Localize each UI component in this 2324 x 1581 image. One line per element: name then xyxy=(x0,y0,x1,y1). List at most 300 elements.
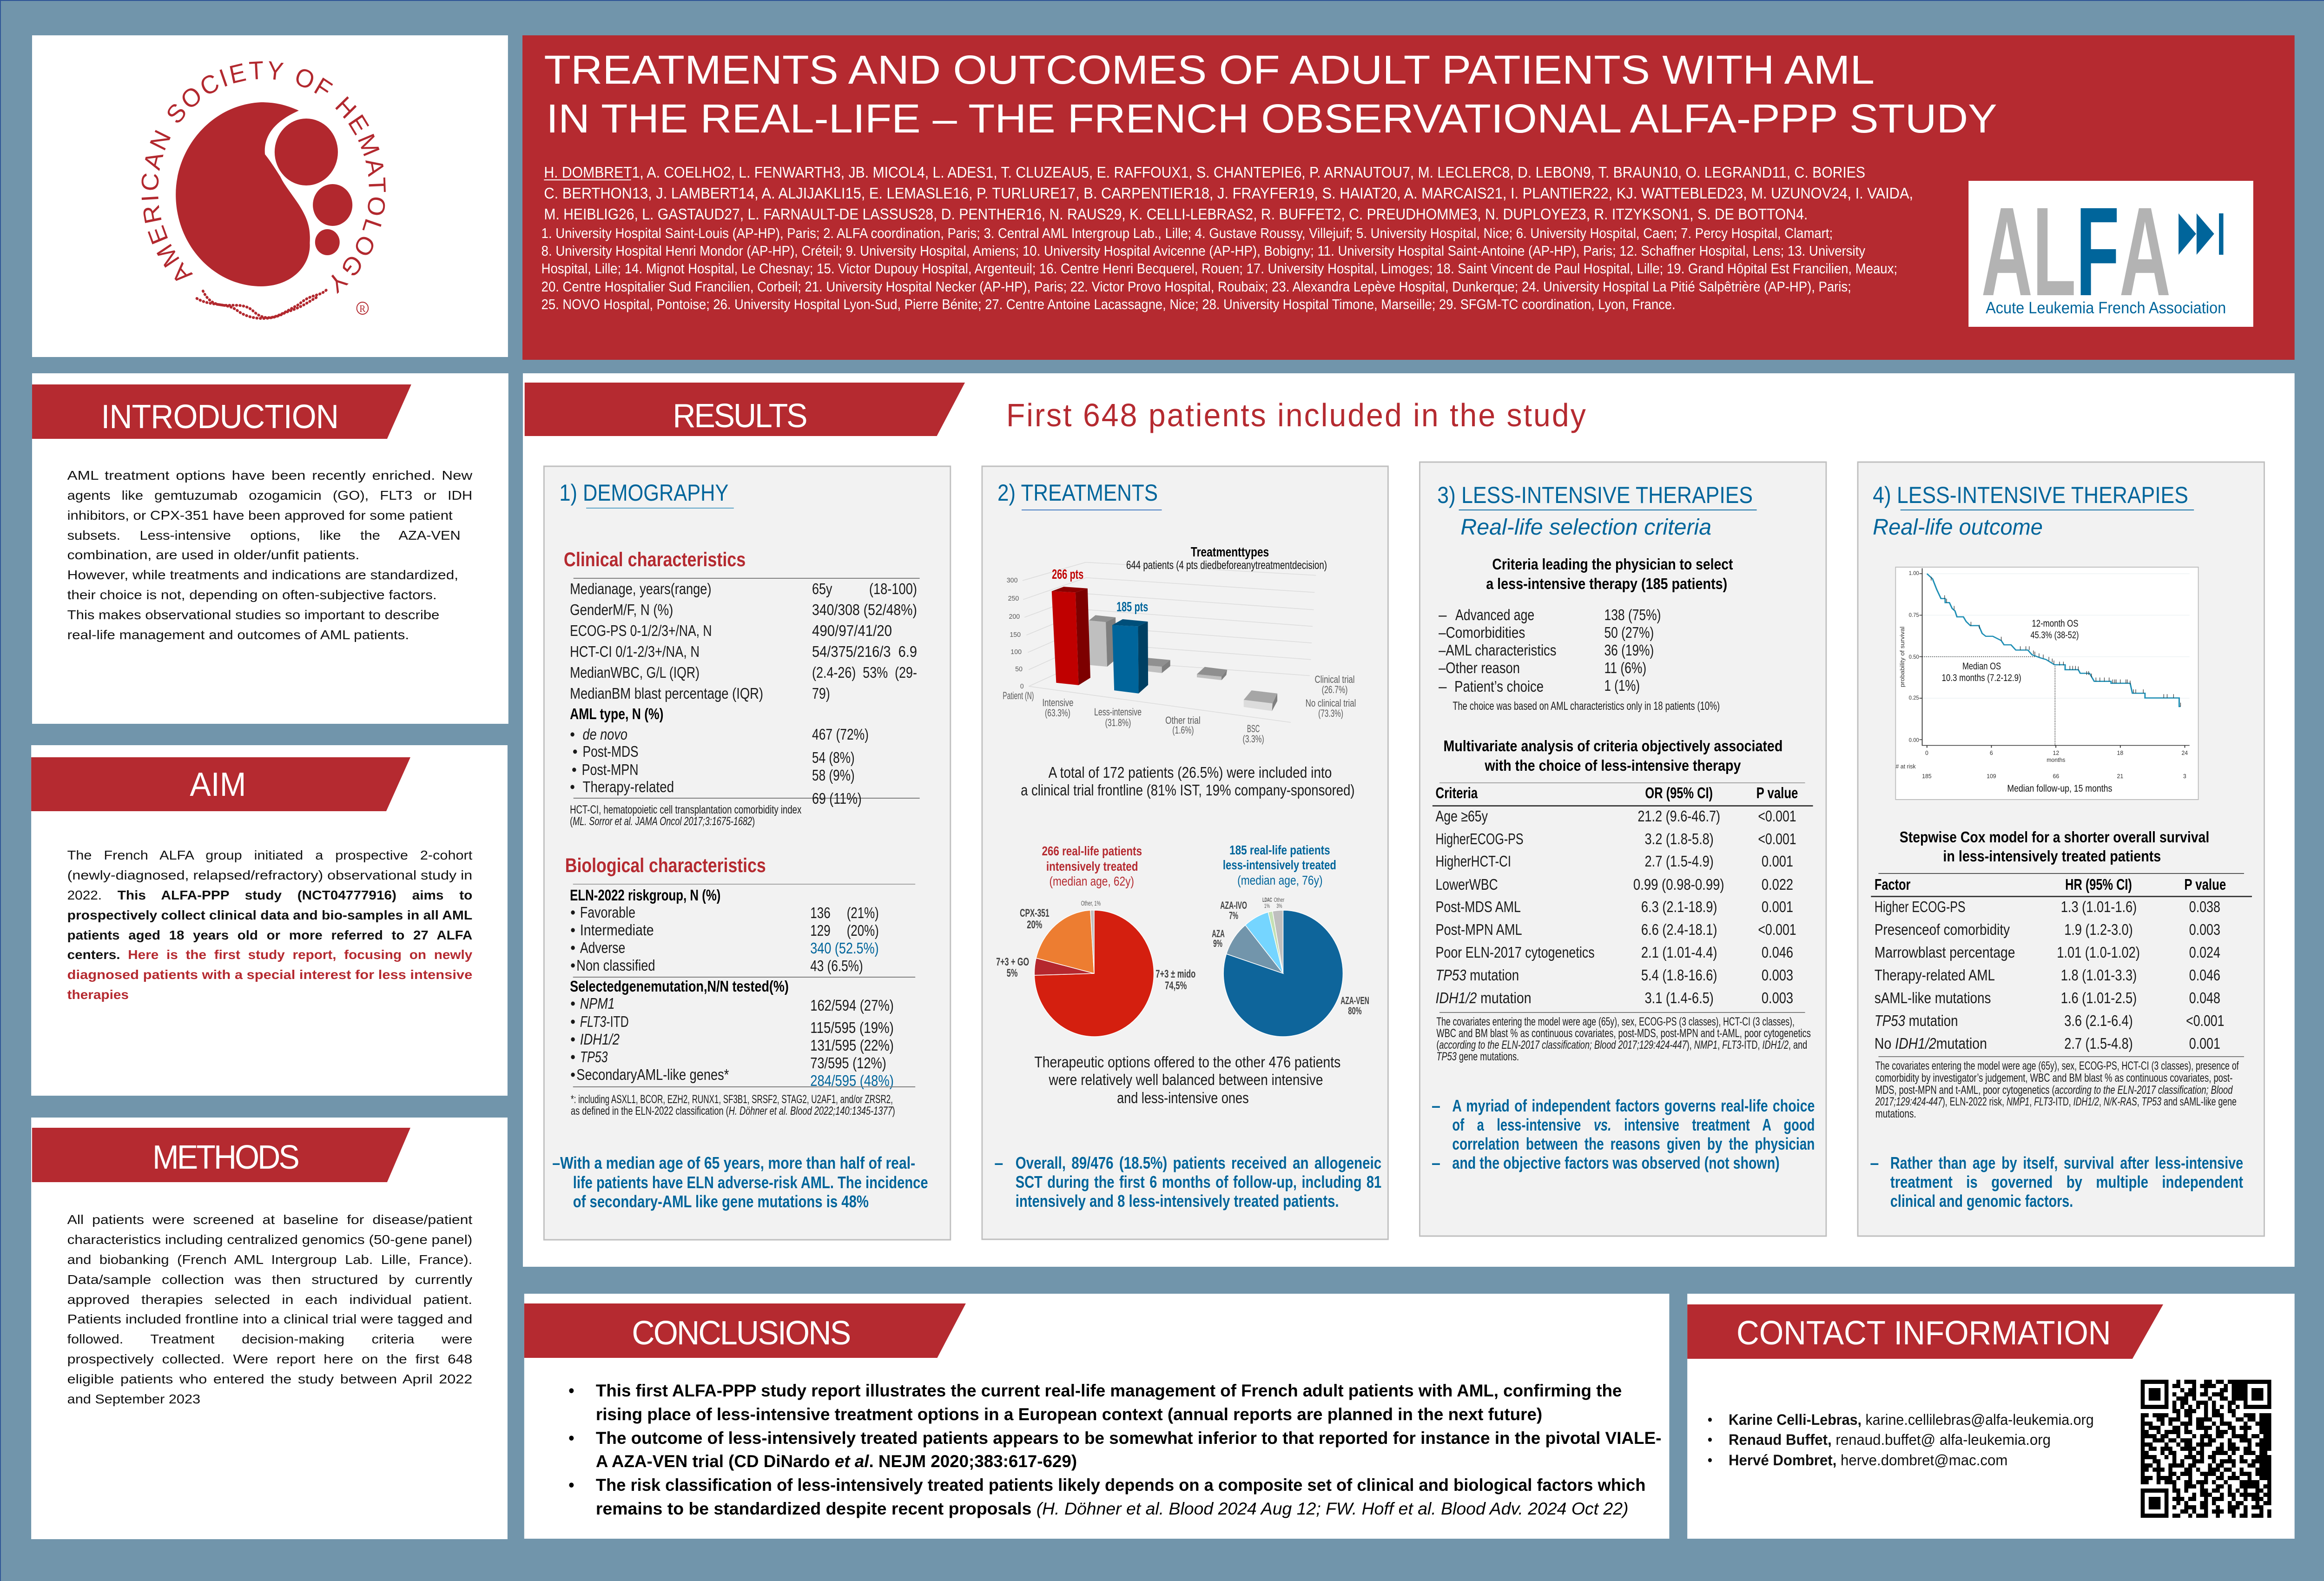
text: methods body: prospectively collected. Were report here on the first 648 xyxy=(67,1351,472,1366)
chart: pie of intensive treatments: CPX-351 xyxy=(1020,906,1050,919)
text: aim body: centers. Here is the first study report, focusing on newly xyxy=(67,947,472,962)
table: clinical characteristics: 54 (8%) xyxy=(812,749,855,766)
chart: pie of less-intensive treatments: AZA-VEN xyxy=(1340,995,1369,1006)
chart: pie of intensive treatments xyxy=(996,900,1195,1037)
chart: 3D bar chart of treatment types: 250 xyxy=(1008,595,1019,602)
icon: QR code xyxy=(2141,1380,2271,1518)
text: introduction body: agents like gemtuzumab ozogamicin (GO), FLT3 or IDH xyxy=(67,488,472,503)
table: multivariate analysis: WBC and BM blast % as continuous covariates, post-MDS, post-MPN and t-AML, poor cytogenetics xyxy=(1436,1027,1811,1040)
chart: Kaplan-Meier survival curve: 10.3 months (7.2-12.9) xyxy=(1942,673,2021,683)
table: multivariate analysis: P value xyxy=(1756,784,1798,801)
heading: demography: 1) DEMOGRAPHY xyxy=(559,480,728,506)
table: clinical characteristics: 467 (72%) xyxy=(812,726,869,743)
text: methods body: eligible patients who entered the study between April 2022 xyxy=(67,1371,472,1386)
list: conclusions: The outcome of less-intensively treated patients appears to be somewhat inferior to that reported for instance in the pivotal VIALE- xyxy=(596,1428,1661,1448)
text: introduction body xyxy=(67,468,473,642)
chart: 3D bar chart of treatment types: Less-intensive xyxy=(1094,706,1142,718)
heading: less-intensive therapies xyxy=(1437,483,1757,539)
table: biological characteristics: IDH1/2 xyxy=(580,1031,620,1048)
list: contacts: Hervé Dombret, herve.dombret@mac.com xyxy=(1729,1452,2007,1469)
text: therapeutic options: and less-intensive ones xyxy=(1117,1089,1249,1106)
table: clinical characteristics: Post-MPN xyxy=(582,761,639,778)
heading: less-intensive therapies: Real-life selection criteria xyxy=(1460,515,1711,539)
table: stepwise Cox model: Higher ECOG-PS xyxy=(1875,898,1966,915)
list: selection criteria: Patient’s choice xyxy=(1454,678,1544,695)
callout: treatment takeaway xyxy=(994,1154,1381,1211)
table: multivariate analysis: Multivariate analysis of criteria objectively associated xyxy=(1444,737,1783,754)
list: conclusions: • xyxy=(568,1475,574,1495)
chart: 3D bar chart of treatment types: No clinical trial xyxy=(1306,697,1356,709)
list: selection criteria: Advanced age xyxy=(1455,606,1534,623)
table: biological characteristics: 115/595 (19%) xyxy=(810,1019,894,1036)
callout: outcome takeaway: – xyxy=(1870,1154,1879,1172)
chart: 3D bar chart of treatment types: Other trial xyxy=(1165,714,1201,726)
table: clinical characteristics: (18-100) xyxy=(869,580,917,597)
table: stepwise Cox model: TP53 mutation xyxy=(1875,1012,1958,1029)
text: therapeutic options: Therapeutic options offered to the other 476 patients xyxy=(1034,1053,1340,1071)
text: clinical trial inclusion xyxy=(1021,764,1355,799)
affiliations xyxy=(541,225,1897,312)
panel: treatments xyxy=(982,466,1388,1239)
list: selection criteria: – xyxy=(1439,678,1447,695)
authors xyxy=(544,164,1913,223)
text: methods body: followed. Treatment decision-making criteria were xyxy=(67,1331,472,1346)
chart: Kaplan-Meier survival curve: # at risk xyxy=(1896,763,1916,770)
table: clinical characteristics: Clinical characteristics xyxy=(564,548,746,570)
table: multivariate analysis: 0.001 xyxy=(1762,898,1793,915)
chart heading: less-intensive patients: 185 real-life patients xyxy=(1229,842,1330,857)
text: aim body: patients aged 18 years old or more referred to 27 ALFA xyxy=(67,927,472,942)
chart: 3D bar chart of treatment types: 185 pts xyxy=(1116,599,1148,614)
chart: Kaplan-Meier survival curve: 12-month OS xyxy=(2032,619,2079,629)
chart: Kaplan-Meier survival curve: 185 xyxy=(1922,773,1932,780)
panel: aim xyxy=(31,745,508,1096)
table: multivariate analysis: The covariates entering the model were age (65y), sex, ECOG-PS (3 classes), HCT-CI (3 classes), xyxy=(1436,1015,1795,1028)
table: biological characteristics: • xyxy=(570,995,575,1012)
table: stepwise Cox model: 0.046 xyxy=(2189,966,2220,984)
panel: results xyxy=(523,373,2295,1267)
table: multivariate analysis: 5.4 (1.8-16.6) xyxy=(1641,966,1717,984)
chart: 3D bar chart of treatment types: Clinical trial xyxy=(1315,674,1355,685)
chart: Kaplan-Meier survival curve: probability of survival xyxy=(1899,627,1906,687)
panel: title header xyxy=(522,35,2295,360)
table: biological characteristics: (21%) xyxy=(847,904,879,921)
table: multivariate analysis: <0.001 xyxy=(1758,830,1796,847)
table: stepwise Cox model: 0.038 xyxy=(2189,898,2220,915)
list: selection criteria: –AML characteristics xyxy=(1439,642,1556,659)
table: clinical characteristics: 490/97/41/20 xyxy=(812,622,892,639)
table: clinical characteristics: MedianBM blast percentage (IQR) xyxy=(570,685,763,702)
table: biological characteristics: • xyxy=(570,1031,575,1048)
callout: outcome takeaway: clinical and genomic factors. xyxy=(1890,1192,2073,1211)
table: clinical characteristics: Therapy-related xyxy=(583,778,674,795)
callout: demography takeaway: –With a median age of 65 years, more than half of real- xyxy=(552,1154,915,1172)
heading: less-intensive outcome xyxy=(1873,483,2194,539)
table: stepwise Cox model: 0.024 xyxy=(2189,944,2220,961)
callout: selection takeaway: of a less-intensive vs. intensive treatment A good xyxy=(1452,1116,1815,1134)
table: multivariate analysis: 0.001 xyxy=(1762,853,1793,870)
authors: H. DOMBRET1, A. COELHO2, L. FENWARTH3, JB. MICOL4, L. ADES1, T. CLUZEAU5, E. RAFFOUX1, S. CHANTEPIE6, P. ARNAUTOU7, M. LECLERC8, D. LEBON9, T. BRAUN10, O. LEGRAND11, C. BORIES xyxy=(544,164,1865,181)
chart: Kaplan-Meier survival curve: 45.3% (38-52) xyxy=(2031,630,2079,641)
list: selection criteria: – xyxy=(1439,606,1447,623)
table: biological characteristics: 284/595 (48%) xyxy=(810,1072,894,1089)
heading: less-intensive outcome: 4) LESS-INTENSIVE THERAPIES xyxy=(1873,483,2188,508)
table: multivariate analysis: with the choice of less-intensive therapy xyxy=(1484,757,1741,774)
registered mark: R xyxy=(359,304,366,314)
chart: pie of less-intensive treatments: 1% xyxy=(1264,903,1270,909)
text: introduction body: their choice is not, depending on often-subjective factors. xyxy=(67,587,437,602)
chart: 3D bar chart of treatment types: BSC xyxy=(1247,723,1260,734)
table: biological characteristics: Intermediate xyxy=(580,921,654,939)
text: aim body: diagnosed patients with a special interest for less intensive xyxy=(67,967,472,982)
text: methods body: approved therapies selected in each individual patient. xyxy=(67,1292,472,1307)
chart: pie of intensive treatments: 20% xyxy=(1027,918,1043,931)
table: stepwise Cox model: MDS, post-MPN and t-AML, poor cytogenetics (according to the ELN-2017 classification; Blood xyxy=(1875,1084,2233,1097)
chart: 3D bar chart of treatment types: (63.3%) xyxy=(1045,707,1070,719)
panel: contact information xyxy=(1687,1294,2295,1539)
text: therapeutic options xyxy=(1034,1053,1340,1106)
chart heading: intensive patients: (median age, 62y) xyxy=(1050,873,1134,888)
text: clinical trial inclusion: a clinical trial frontline (81% IST, 19% company-sponsored) xyxy=(1021,781,1355,799)
table: biological characteristics: *: including ASXL1, BCOR, EZH2, RUNX1, SF3B1, SRSF2, STAG2, U2AF1, and/or ZRSR2, xyxy=(571,1093,893,1106)
table: stepwise Cox model: sAML-like mutations xyxy=(1875,989,1991,1006)
table: multivariate analysis: 6.3 (2.1-18.9) xyxy=(1641,898,1717,915)
heading: introduction: INTRODUCTION xyxy=(101,398,339,435)
authors: C. BERTHON13, J. LAMBERT14, A. ALJIJAKLI15, E. LEMASLE16, P. TURLURE17, B. CARPENTIER18, J. FRAYFER19, S. HAIAT20, A. MARCAIS21, I. PLANTIER22, KJ. WATTEBLED23, M. UZUNOV24, I. VAIDA, xyxy=(544,185,1913,202)
chart: pie of less-intensive treatments: LDAC xyxy=(1262,897,1272,903)
title: IN THE REAL-LIFE – THE FRENCH OBSERVATIONAL ALFA-PPP STUDY xyxy=(546,96,1997,141)
list: contacts: Karine Celli-Lebras, karine.cellilebras@alfa-leukemia.org xyxy=(1729,1411,2094,1428)
table: stepwise Cox model: Stepwise Cox model for a shorter overall survival xyxy=(1900,828,2209,846)
list: conclusions: rising place of less-intensive treatment options in a European context (annual reports are planned in the next future) xyxy=(596,1404,1542,1424)
table: biological characteristics: Biological characteristics xyxy=(565,854,766,876)
table: multivariate analysis: <0.001 xyxy=(1758,807,1796,825)
chart: Kaplan-Meier survival curve: 0.25 xyxy=(1909,695,1919,701)
list: conclusions: This first ALFA-PPP study report illustrates the current real-life management of French adult patients with AML, confirming the xyxy=(596,1381,1622,1400)
callout: treatment takeaway: – xyxy=(994,1154,1003,1172)
registered mark xyxy=(357,302,368,314)
chart: pie of intensive treatments: 7+3 + GO xyxy=(996,955,1029,968)
chart: Kaplan-Meier survival curve: months xyxy=(2047,757,2065,763)
text: therapeutic options: were relatively well balanced between intensive xyxy=(1049,1071,1323,1088)
panel: introduction xyxy=(32,373,508,724)
text: aim body: (newly-diagnosed, relapsed/refractory) observational study in xyxy=(67,867,472,882)
heading: treatments: 2) TREATMENTS xyxy=(997,480,1158,506)
chart: pie of intensive treatments: Other, 1% xyxy=(1081,900,1101,907)
list: selection criteria: Criteria leading the physician to select xyxy=(1492,556,1733,573)
text: introduction body: combination, are used in older/unfit patients. xyxy=(67,547,359,562)
chart: 3D bar chart of treatment types: (73.3%) xyxy=(1318,708,1343,719)
list: conclusions: A AZA-VEN trial (CD DiNardo et al. NEJM 2020;383:617-629) xyxy=(596,1451,1077,1471)
table: biological characteristics: Adverse xyxy=(580,939,625,956)
table: stepwise Cox model: 2017;129:424-447), ELN-2022 risk, NMP1, FLT3-ITD, IDH1/2, N/K-RAS, TP53 and sAML-like gene xyxy=(1875,1095,2237,1108)
text: aim body: prospectively collect clinical data and bio-samples in all AML xyxy=(67,907,472,922)
authors: M. HEIBLIG26, L. GASTAUD27, L. FARNAULT-DE LASSUS28, D. PENTHER16, N. RAUS29, K. CELLI-LEBRAS2, R. BUFFET2, C. PREUDHOMME3, N. DUPLOYEZ3, R. ITZYKSON1, S. DE BOTTON4. xyxy=(544,205,1808,223)
table: biological characteristics: TP53 xyxy=(580,1048,608,1065)
text: introduction body: inhibitors, or CPX-351 have been approved for some patient xyxy=(67,508,453,523)
text: methods body: characteristics including centralized genomics (50-gene panel) xyxy=(67,1232,472,1247)
text: introduction body: real-life management and outcomes of AML patients. xyxy=(67,627,409,642)
table: multivariate analysis: HigherECOG-PS xyxy=(1435,830,1524,847)
list: conclusions: remains to be standardized despite recent proposals (H. Döhner et al. Blood 2024 Aug 12; FW. Hoff et al. Blood Adv. 2024 Oct 22) xyxy=(596,1499,1628,1518)
table: clinical characteristics: (2.4-26) 53% (29- xyxy=(812,664,917,681)
table: stepwise Cox model: <0.001 xyxy=(2186,1012,2224,1029)
heading: conclusions xyxy=(524,1303,966,1358)
chart: 3D bar chart of treatment types: Intensive xyxy=(1042,697,1074,708)
chart heading: less-intensive patients xyxy=(1223,842,1336,887)
chart: Kaplan-Meier survival curve xyxy=(1895,567,2199,800)
list: contacts: Renaud Buffet, renaud.buffet@ alfa-leukemia.org xyxy=(1729,1431,2051,1448)
table: stepwise Cox model: Marrowblast percentage xyxy=(1875,944,2015,961)
panel: conclusions xyxy=(524,1294,1669,1539)
affiliations: 20. Centre Hospitalier Sud Francilien, Corbeil; 21. University Hospital Necker (AP-HP), Paris; 22. Victor Provo Hospital, Roubaix; 23. Alexandra Lepève Hospital, Dunkerque; 24. University Hospital La Pitié Salpêtrière (AP-HP), Paris; xyxy=(541,279,1851,295)
list: selection criteria: –Comorbidities xyxy=(1439,624,1525,641)
table: clinical characteristics: • xyxy=(573,743,578,760)
table: clinical characteristics: • xyxy=(570,726,575,743)
chart heading: intensive patients: 266 real-life patients xyxy=(1042,843,1142,858)
text: methods body: All patients were screened at baseline for disease/patient xyxy=(67,1212,473,1227)
chart: pie of intensive treatments: 5% xyxy=(1007,966,1018,979)
table: stepwise Cox model: Factor xyxy=(1875,876,1911,893)
chart: Kaplan-Meier survival curve: 66 xyxy=(2053,773,2059,780)
table: clinical characteristics: GenderM/F, N (%) xyxy=(570,601,673,618)
table: multivariate analysis: Age ≥65y xyxy=(1435,807,1488,825)
table: clinical characteristics: HCT-CI 0/1-2/3+/NA, N xyxy=(570,643,700,660)
table: clinical characteristics: AML type, N (%) xyxy=(570,705,663,722)
callout: treatment takeaway: Overall, 89/476 (18.5%) patients received an allogeneic xyxy=(1016,1154,1381,1172)
callout: selection takeaway: A myriad of independent factors governs real-life choice xyxy=(1452,1097,1815,1115)
table: multivariate analysis: 21.2 (9.6-46.7) xyxy=(1637,807,1720,825)
callout: selection takeaway: – xyxy=(1432,1097,1440,1115)
table: clinical characteristics: HCT-CI, hematopoietic cell transplantation comorbidity index xyxy=(570,803,801,816)
chart: 3D bar chart of treatment types: 200 xyxy=(1009,613,1020,621)
icon: DNA strand xyxy=(197,289,327,318)
heading: contact information: CONTACT INFORMATION xyxy=(1736,1314,2111,1351)
chart: 3D bar chart of treatment types: 266 pts xyxy=(1052,566,1083,582)
chart: pie of less-intensive treatments: AZA-IVO xyxy=(1220,900,1247,911)
panel: less-intensive selection xyxy=(1419,462,1826,1236)
text: methods body xyxy=(67,1212,473,1406)
chart: Kaplan-Meier survival curve: 21 xyxy=(2117,773,2123,780)
chart: Kaplan-Meier survival curve: 3 xyxy=(2183,773,2186,780)
table: stepwise Cox model: 1.01 (1.0-1.02) xyxy=(2057,944,2140,961)
table: clinical characteristics: de novo xyxy=(583,726,627,743)
table: multivariate analysis: TP53 mutation xyxy=(1435,966,1519,984)
list: selection criteria: 138 (75%) xyxy=(1604,606,1661,623)
table: clinical characteristics: (ML. Sorror et al. JAMA Oncol 2017;3:1675-1682) xyxy=(570,815,755,828)
table: clinical characteristics xyxy=(564,548,920,828)
table: biological characteristics: • xyxy=(570,904,575,921)
table: multivariate analysis: 2.7 (1.5-4.9) xyxy=(1644,853,1714,870)
list: selection criteria: The choice was based on AML characteristics only in 18 patients (10%) xyxy=(1452,700,1720,713)
table: multivariate analysis: IDH1/2 mutation xyxy=(1435,989,1532,1006)
chart: 3D bar chart of treatment types: 150 xyxy=(1010,631,1021,639)
heading: methods: METHODS xyxy=(152,1138,300,1176)
list: selection criteria xyxy=(1439,556,1733,713)
table: biological characteristics: 43 (6.5%) xyxy=(810,957,863,974)
table: biological characteristics: • xyxy=(570,921,575,939)
list: selection criteria: –Other reason xyxy=(1439,659,1520,676)
heading: aim: AIM xyxy=(190,766,246,803)
callout: demography takeaway: of secondary-AML like gene mutations is 48% xyxy=(573,1192,869,1211)
table: clinical characteristics: ECOG-PS 0-1/2/3+/NA, N xyxy=(570,622,712,639)
chart: pie of less-intensive treatments: Other xyxy=(1274,897,1284,903)
chart: pie of less-intensive treatments: 7% xyxy=(1229,910,1238,921)
logo circular text: AMERICAN SOCIETY OF HEMATOLOGY xyxy=(137,56,390,299)
chart heading: intensive patients: intensively treated xyxy=(1046,859,1138,873)
table: clinical characteristics: 340/308 (52/48%) xyxy=(812,601,917,618)
table: stepwise Cox model: 2.7 (1.5-4.8) xyxy=(2064,1035,2133,1052)
list: contacts xyxy=(1708,1411,2094,1469)
table: biological characteristics: 131/595 (22%) xyxy=(810,1037,894,1054)
callout: treatment takeaway: SCT during the first 6 months of follow-up, including 81 xyxy=(1016,1173,1381,1191)
chart: 3D bar chart of treatment types: 300 xyxy=(1007,577,1017,584)
table: stepwise Cox model: comorbidity by investigator’s judgement, WBC and BM blast % as continuous covariates, post- xyxy=(1875,1072,2232,1085)
table: biological characteristics: 162/594 (27%) xyxy=(810,997,894,1014)
title xyxy=(544,47,1997,141)
table: stepwise Cox model: in less-intensively treated patients xyxy=(1943,847,2161,865)
text: introduction body: This makes observational studies so important to describe xyxy=(67,607,439,622)
text: aim body: The French ALFA group initiated a prospective 2-cohort xyxy=(67,847,473,862)
affiliations: 8. University Hospital Henri Mondor (AP-HP), Créteil; 9. University Hospital, Amiens; 10. University Hospital Avicenne (AP-HP), Bobigny; 11. University Hospital Saint-Antoine (AP-HP), Paris; 12. Schaffner Hospital, Lens; 13. University xyxy=(541,243,1866,259)
chart: Kaplan-Meier survival curve: 6 xyxy=(1990,750,1993,756)
table: stepwise Cox model: 1.6 (1.01-2.5) xyxy=(2061,989,2137,1006)
chart: 3D bar chart of treatment types: (1.6%) xyxy=(1172,724,1194,736)
chart: pie of less-intensive treatments xyxy=(1212,897,1369,1037)
logo: ALFA: Acute Leukemia French Association xyxy=(1986,299,2226,317)
text: clinical trial inclusion: A total of 172 patients (26.5%) were included into xyxy=(1049,764,1332,781)
affiliations: 25. NOVO Hospital, Pontoise; 26. University Hospital Lyon-Sud, Pierre Bénite; 27. Centre Antoine Lacassagne, Nice; 28. University Hospital Timone, Marseille; 29. SFGM-TC coordination, Lyon, France. xyxy=(541,297,1676,312)
callout: selection takeaway: and the objective factors was observed (not shown) xyxy=(1452,1154,1780,1172)
callout: demography takeaway: life patients have ELN adverse-risk AML. The incidence xyxy=(573,1173,928,1192)
text: methods body: and biobanking (French AML Intergroup Lab. Lille, France). xyxy=(67,1252,472,1267)
table: biological characteristics: ELN-2022 riskgroup, N (%) xyxy=(570,886,720,904)
table: biological characteristics: (20%) xyxy=(847,922,879,939)
table: multivariate analysis: Post-MDS AML xyxy=(1435,898,1521,915)
chart: 3D bar chart of treatment types: 100 xyxy=(1010,648,1022,656)
table: multivariate analysis: (according to the ELN-2017 classification; Blood 2017;129:424-447), NMP1, FLT3-ITD, IDH1/2, and xyxy=(1436,1039,1807,1052)
table: stepwise Cox model: 1.8 (1.01-3.3) xyxy=(2061,966,2137,984)
chart: 3D bar chart of treatment types: (3.3%) xyxy=(1242,733,1264,745)
heading: results xyxy=(525,383,965,436)
heading: methods xyxy=(32,1128,410,1182)
list: conclusions: • xyxy=(568,1381,574,1400)
chart heading: less-intensive patients: less-intensively treated xyxy=(1223,857,1336,872)
chart: pie of intensive treatments: 7+3 ± mido xyxy=(1155,967,1195,980)
chart heading: intensive patients xyxy=(1042,843,1142,888)
chart: 3D bar chart of treatment types: 644 patients (4 pts diedbeforeanytreatmentdecision) xyxy=(1126,559,1327,572)
table: multivariate analysis: Poor ELN-2017 cytogenetics xyxy=(1435,944,1595,961)
table: clinical characteristics: 79) xyxy=(812,685,830,702)
table: biological characteristics: 129 xyxy=(810,922,831,939)
heading: conclusions: CONCLUSIONS xyxy=(632,1314,851,1351)
table: multivariate analysis: Post-MPN AML xyxy=(1435,921,1522,938)
chart: 3D bar chart of treatment types: Patient (N) xyxy=(1003,690,1034,701)
table: biological characteristics: • xyxy=(570,1048,575,1065)
table: multivariate analysis: <0.001 xyxy=(1758,921,1796,938)
table: clinical characteristics: Medianage, years(range) xyxy=(570,580,712,597)
table: stepwise Cox model: 3.6 (2.1-6.4) xyxy=(2064,1012,2133,1029)
list: conclusions: • xyxy=(568,1428,574,1448)
list: selection criteria: 1 (1%) xyxy=(1604,677,1640,694)
table: clinical characteristics: 69 (11%) xyxy=(812,790,862,807)
table: biological characteristics: SecondaryAML-like genes* xyxy=(576,1066,729,1083)
list: selection criteria: 50 (27%) xyxy=(1604,624,1654,641)
table: multivariate analysis: OR (95% CI) xyxy=(1645,784,1713,801)
table: clinical characteristics: 54/375/216/3 6.9 xyxy=(812,643,917,660)
text: methods body: Patients included frontline into a clinical trial were tagged and xyxy=(67,1311,472,1326)
table: biological characteristics: • xyxy=(570,1066,575,1083)
text: methods body: and September 2023 xyxy=(67,1391,200,1406)
table: biological characteristics xyxy=(565,854,915,1118)
heading: results: RESULTS xyxy=(673,397,808,434)
table: clinical characteristics: 58 (9%) xyxy=(812,767,855,784)
chart: 3D bar chart of treatment types: 50 xyxy=(1015,666,1023,673)
panel: methods xyxy=(31,1118,508,1539)
list: selection criteria: 11 (6%) xyxy=(1604,659,1646,676)
chart: 3D bar chart of treatment types xyxy=(1003,544,1356,745)
list: contacts: • xyxy=(1708,1411,1712,1428)
callout: selection takeaway xyxy=(1432,1097,1815,1172)
table: multivariate analysis: 0.046 xyxy=(1762,944,1793,961)
table: biological characteristics: 136 xyxy=(810,904,831,921)
table: multivariate analysis: 0.022 xyxy=(1762,876,1793,893)
table: clinical characteristics: • xyxy=(572,761,577,778)
table: multivariate analysis: 6.6 (2.4-18.1) xyxy=(1641,921,1717,938)
text: aim body: 2022. This ALFA-PPP study (NCT04777916) aims to xyxy=(67,887,472,902)
title: TREATMENTS AND OUTCOMES OF ADULT PATIENTS WITH AML xyxy=(544,47,1875,92)
heading: introduction xyxy=(32,384,411,439)
chart: Kaplan-Meier survival curve: 109 xyxy=(1987,773,1996,780)
table: stepwise Cox model: mutations. xyxy=(1875,1107,1916,1120)
chart: pie of less-intensive treatments: 3% xyxy=(1276,903,1282,909)
table: biological characteristics: as defined in the ELN-2022 classification (H. Döhner et al. Blood 2022;140:1345-1377) xyxy=(571,1105,895,1118)
table: multivariate analysis xyxy=(1433,737,1813,1063)
list: selection criteria: 36 (19%) xyxy=(1604,642,1654,659)
table: stepwise Cox model: Presenceof comorbidity xyxy=(1875,921,2010,938)
chart: Kaplan-Meier survival curve: 18 xyxy=(2117,750,2123,756)
table: stepwise Cox model: 0.001 xyxy=(2189,1035,2220,1052)
list: conclusions: The risk classification of less-intensively treated patients likely depends on a composite set of clinical and biological factors which xyxy=(596,1475,1645,1495)
list: conclusions xyxy=(568,1381,1661,1518)
table: multivariate analysis: 3.1 (1.4-6.5) xyxy=(1644,989,1714,1006)
text: introduction body: However, while treatments and indications are standardized, xyxy=(67,567,458,582)
list: contacts: • xyxy=(1708,1431,1712,1448)
table: biological characteristics: • xyxy=(570,1013,575,1030)
table: biological characteristics: Non classified xyxy=(576,957,655,974)
table: stepwise Cox model: 0.003 xyxy=(2189,921,2220,938)
table: multivariate analysis: TP53 gene mutations. xyxy=(1436,1050,1519,1063)
table: stepwise Cox model: No IDH1/2mutation xyxy=(1875,1035,1987,1052)
table: multivariate analysis: 3.2 (1.8-5.8) xyxy=(1644,830,1714,847)
callout: treatment takeaway: intensively and 8 less-intensively treated patients. xyxy=(1016,1192,1339,1211)
callout: outcome takeaway: Rather than age by itself, survival after less-intensive xyxy=(1890,1154,2243,1172)
list: contacts: • xyxy=(1708,1452,1712,1469)
panel: less-intensive outcome xyxy=(1858,462,2264,1236)
text: introduction body: subsets. Less-intensive options, like the AZA-VEN xyxy=(67,528,461,542)
chart: 3D bar chart of treatment types: Treatmenttypes xyxy=(1191,544,1269,559)
chart: Kaplan-Meier survival curve: 0.00 xyxy=(1909,737,1919,743)
callout: outcome takeaway xyxy=(1870,1154,2243,1211)
table: multivariate analysis: 0.99 (0.98-0.99) xyxy=(1633,876,1724,893)
chart: Kaplan-Meier survival curve: 0.75 xyxy=(1909,612,1919,618)
chart heading: less-intensive patients: (median age, 76y) xyxy=(1237,873,1323,887)
chart: 3D bar chart of treatment types: (26.7%) xyxy=(1322,684,1347,695)
table: clinical characteristics: 65y xyxy=(812,580,832,597)
table: clinical characteristics: MedianWBC, G/L (IQR) xyxy=(570,664,700,681)
logo: ALFA: ALFA xyxy=(1981,181,2171,323)
chart: Kaplan-Meier survival curve: 1.00 xyxy=(1909,570,1919,576)
